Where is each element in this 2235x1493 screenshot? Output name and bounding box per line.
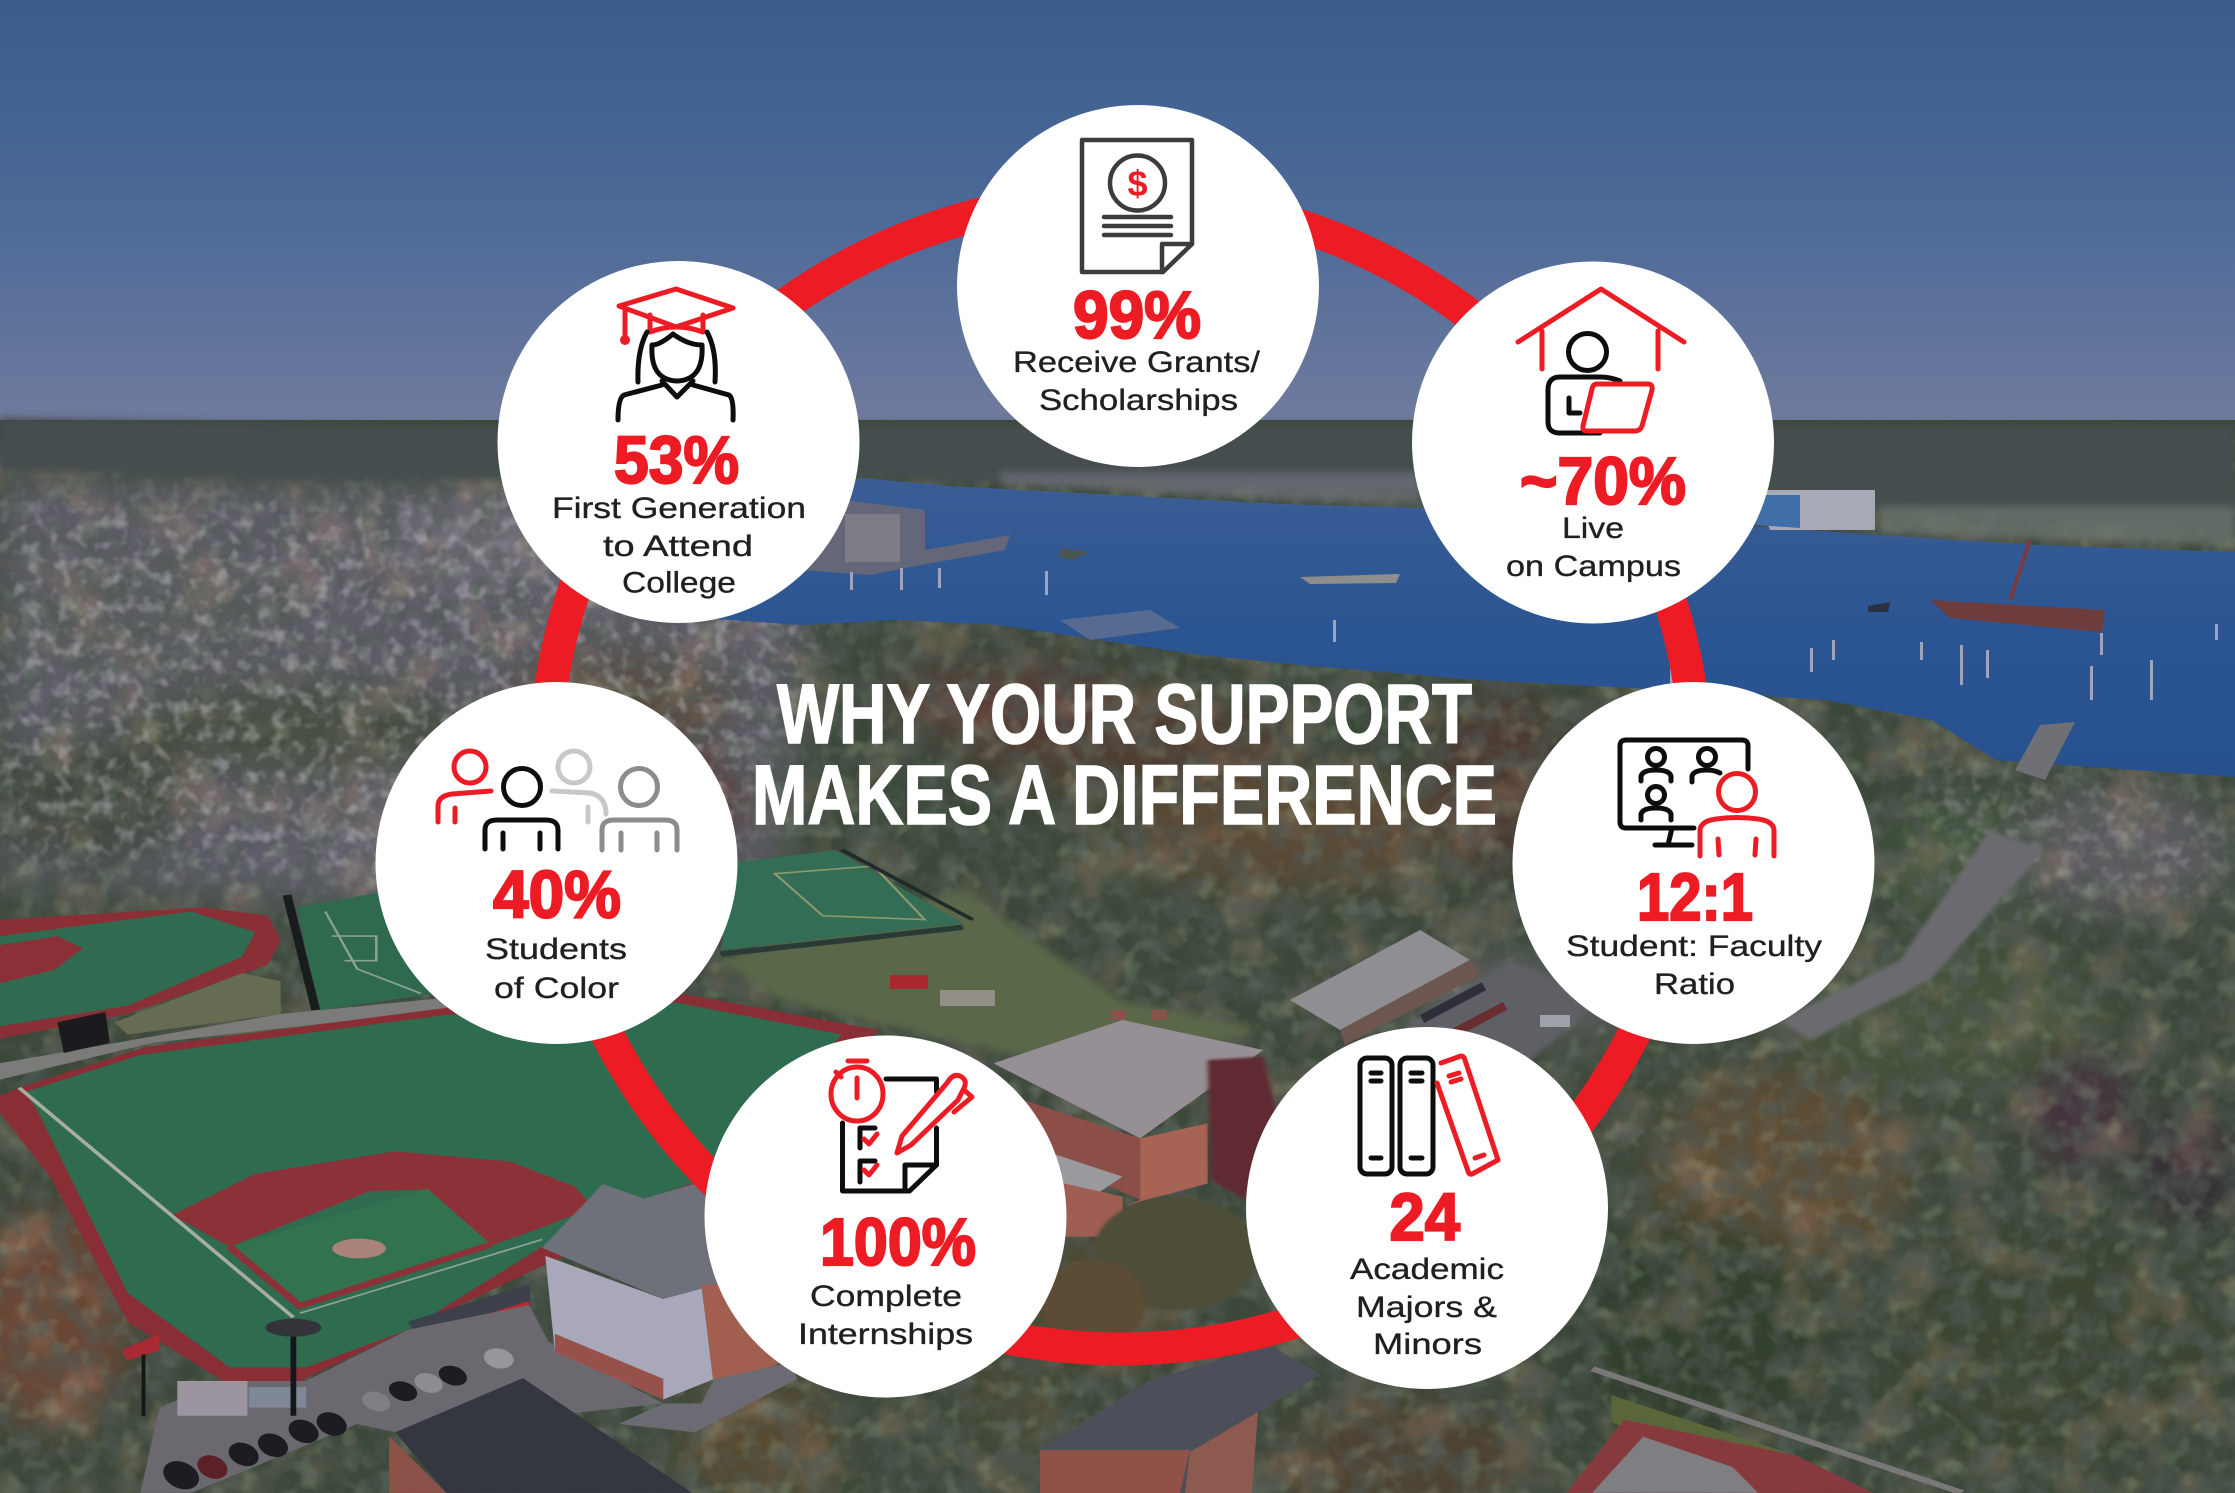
brick hall (993, 1010, 1278, 1347)
tents (890, 975, 995, 1006)
label: receive grants (1013, 346, 1261, 417)
dorm building (542, 1178, 727, 1299)
title (752, 667, 1497, 842)
panel: ~70% live on campus (1412, 262, 1774, 624)
red connecting ring (544, 197, 1696, 1349)
label: academic majors and minors (1350, 1253, 1504, 1361)
label: student faculty ratio (1566, 930, 1822, 1001)
icon: graduate with cap (618, 289, 733, 420)
label: academic majors and minors: Minors (1373, 1328, 1482, 1361)
icon: scholarship document (1082, 140, 1192, 272)
tree and roof texture (0, 440, 2235, 1493)
right shore trees (2010, 790, 2230, 910)
panel: 53% first generation (498, 261, 860, 623)
stat: ~70%: ~70% (1520, 444, 1686, 519)
fence (287, 895, 316, 1010)
main baseball field track (0, 993, 880, 1381)
label: complete internships (798, 1280, 973, 1351)
pavement (140, 1305, 663, 1493)
label: receive grants: Scholarships (1039, 384, 1238, 417)
icon: scholarship document: $ (1127, 163, 1148, 204)
lower centre building (1040, 1345, 1320, 1493)
centre lawn (720, 890, 1260, 1075)
far horizon tree line (0, 418, 2235, 530)
right side town road (1780, 830, 2045, 1040)
stat: 99%: 99% (1073, 278, 1201, 353)
south walkway and court (1567, 1369, 1962, 1493)
label: live on campus: on Campus (1506, 550, 1681, 583)
infield dirt (172, 1151, 593, 1247)
label: academic majors and minors: Majors & (1356, 1291, 1497, 1324)
stat: 24: 24 (1390, 1180, 1460, 1255)
parking lot (1400, 960, 1600, 1060)
label: students of color: of Color (494, 972, 619, 1005)
barge and crane (1930, 600, 2105, 632)
long roof building (1290, 930, 1470, 1030)
label: complete internships: Complete (810, 1280, 962, 1313)
label: student faculty ratio: Student: Faculty (1566, 930, 1822, 963)
black roof building (395, 1378, 692, 1493)
stat: 100%: 100% (820, 1205, 976, 1280)
label: complete internships: Internships (798, 1318, 973, 1351)
town colour patches (0, 480, 850, 910)
icon: online class on monitor (1620, 740, 1774, 856)
title: WHY YOUR SUPPORT (777, 667, 1472, 761)
icon: group of students (438, 751, 677, 850)
title: MAKES A DIFFERENCE (752, 748, 1497, 842)
small practice field (297, 893, 434, 1011)
label: live on campus (1506, 512, 1681, 583)
panel: 100% complete internships (704, 1036, 1066, 1398)
label: first generation: to Attend (603, 530, 753, 563)
peninsula and far shore details (760, 472, 2235, 640)
icon: student in house with laptop (1518, 289, 1684, 433)
softball field track (0, 907, 281, 1039)
panel: 24 academic majors and minors (1246, 1027, 1608, 1389)
stat: 12:1: 12:1 (1637, 860, 1753, 935)
stat: 40%: 40% (493, 858, 621, 932)
soccer field (721, 850, 973, 954)
icon: checklist, stopwatch and pen (831, 1061, 972, 1191)
label: live on campus: Live (1562, 512, 1624, 545)
harbor water (620, 478, 2235, 777)
label: first generation (552, 492, 806, 600)
panel: 40% students of color (376, 682, 738, 1044)
marina pier (2015, 722, 2075, 780)
label: student faculty ratio: Ratio (1654, 968, 1735, 1001)
dugout red shed (408, 1285, 531, 1346)
panel: 12:1 student faculty ratio (1512, 682, 1874, 1044)
label: students of color (485, 933, 627, 1005)
label: academic majors and minors: Academic (1350, 1253, 1504, 1286)
icon: books on shelf (1360, 1056, 1498, 1174)
label: students of color: Students (485, 933, 627, 966)
panel: 99% receive grants (957, 105, 1319, 467)
label: receive grants: Receive Grants/ (1013, 346, 1261, 379)
scoreboard and concession (121, 1334, 159, 1360)
label: first generation: First Generation (552, 492, 806, 525)
foul line (19, 1088, 293, 1317)
sailboats (700, 568, 2218, 700)
label: first generation: College (622, 566, 736, 600)
stat: 53%: 53% (614, 423, 739, 498)
parked cars (156, 1344, 520, 1493)
